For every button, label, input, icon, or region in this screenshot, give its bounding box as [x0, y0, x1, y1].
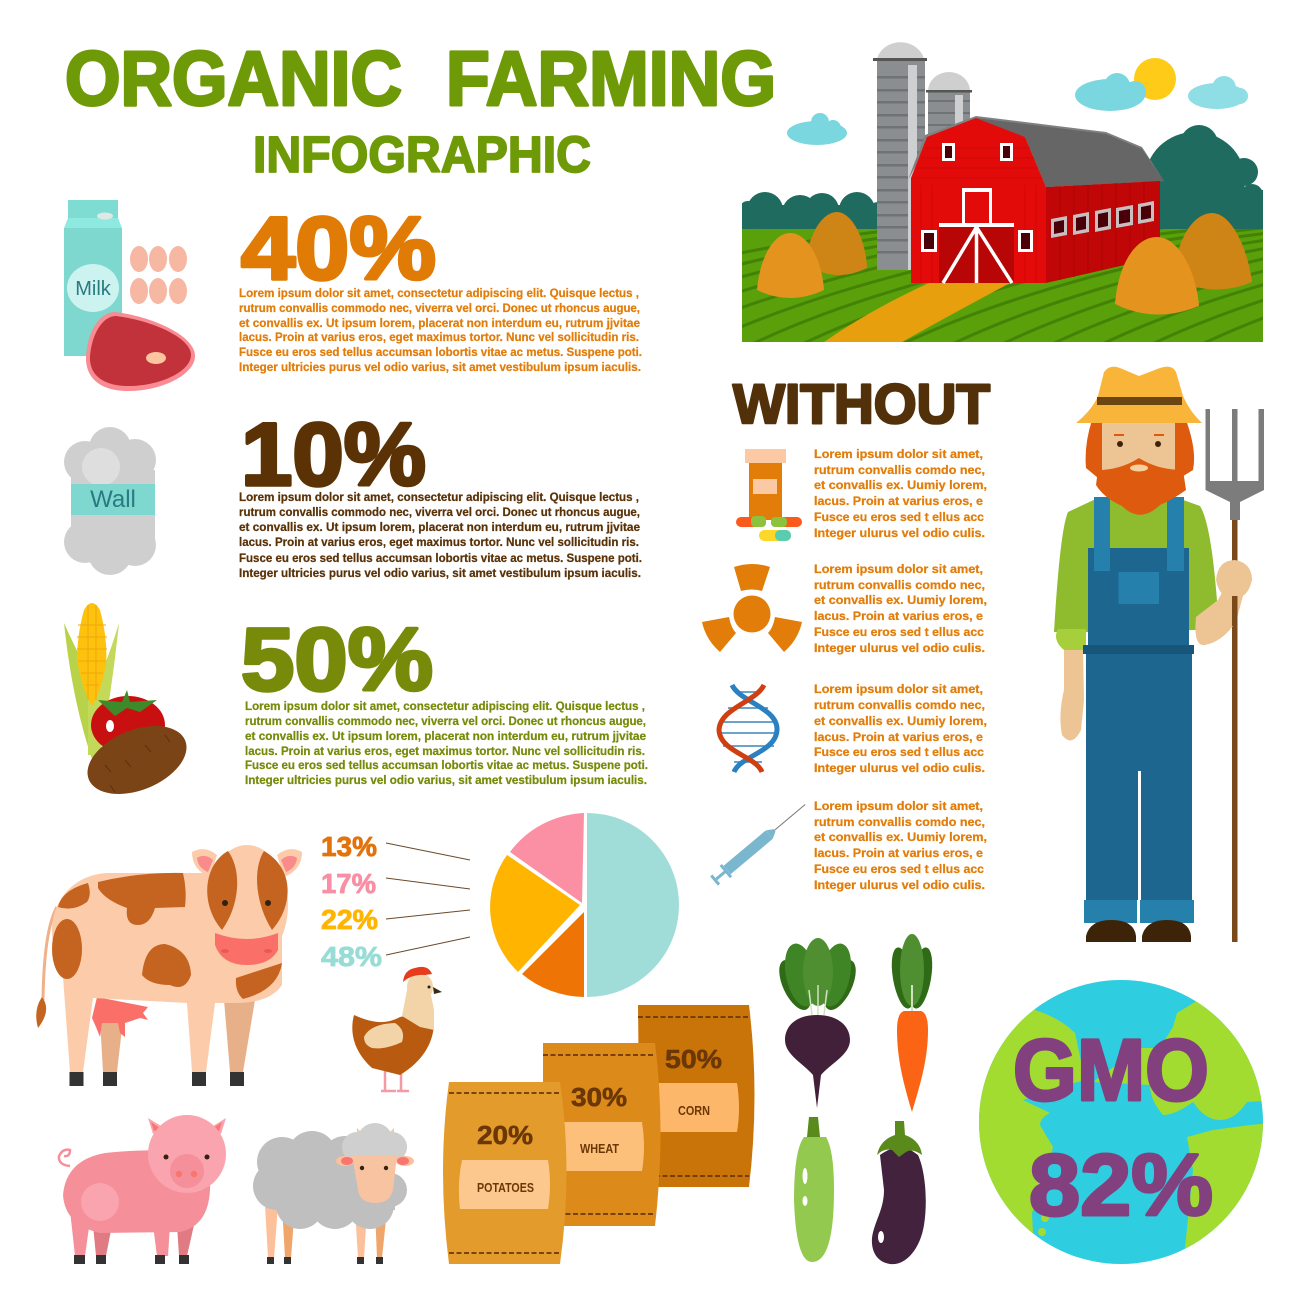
text block: pills: Lorem ipsum dolor sit amet,	[814, 447, 983, 461]
beet	[773, 938, 862, 1108]
haystacks	[757, 212, 1252, 315]
text block: dna: lacus. Proin at varius eros, e	[814, 730, 983, 744]
pitchfork	[1206, 409, 1264, 942]
field	[742, 229, 1263, 342]
text block: 10%	[239, 490, 642, 580]
pie labels: 13%	[321, 831, 377, 862]
path	[824, 283, 1010, 342]
text block: 50%	[245, 699, 648, 787]
wool body	[253, 1131, 407, 1229]
text block: 50%: et convallis ex. Ut ipsum lorem, placerat non interdum eu, rutrum jjvitae	[245, 729, 646, 743]
icon: syringe	[709, 798, 810, 887]
horns	[357, 1128, 394, 1136]
globe	[979, 980, 1263, 1264]
sack: wheat: WHEAT	[580, 1141, 619, 1156]
pie labels: 48%	[321, 941, 382, 972]
text block: pills	[814, 447, 987, 540]
legs	[1086, 654, 1192, 900]
sack: wheat	[543, 1043, 660, 1226]
text block: 50%: Integer ultricies purus vel odio varius, sit amet vestibulum ipsum iaculis.	[245, 773, 647, 787]
pie labels: 22%	[321, 904, 378, 935]
cuffs	[1084, 900, 1194, 923]
continents	[979, 1002, 1263, 1248]
text block: dna: rutrum convallis comdo nec,	[814, 698, 985, 712]
text block: dna: Lorem ipsum dolor sit amet,	[814, 682, 983, 696]
pie leader lines	[386, 843, 470, 955]
text block: syringe: rutrum convallis comdo nec,	[814, 815, 985, 829]
text block: 40%: rutrum convallis commodo nec, viverra vel orci. Donec ut rhoncus augue,	[239, 301, 640, 315]
barn door	[939, 188, 1014, 283]
legs	[265, 1205, 278, 1258]
text block: syringe: lacus. Proin at varius eros, e	[814, 846, 983, 860]
farmer	[1054, 367, 1264, 942]
legs	[93, 1225, 112, 1256]
shoes	[1086, 920, 1191, 942]
ears	[192, 849, 302, 877]
cow	[36, 845, 302, 1086]
text block: 10%: Fusce eu eros sed tellus accumsan lobortis vitae ac metus. Suspene poti.	[239, 551, 642, 565]
sack: corn: CORN	[678, 1103, 710, 1118]
stat: 10%: 10%	[241, 404, 426, 504]
text block: syringe: Lorem ipsum dolor sit amet,	[814, 799, 983, 813]
icon: pill bottle	[736, 449, 802, 541]
face	[352, 1155, 397, 1203]
text block: syringe: Integer ulurus vel odio culis.	[814, 878, 985, 892]
hand	[1216, 560, 1252, 598]
icon: cloud left	[787, 113, 847, 145]
silo back	[926, 72, 972, 152]
right arm	[1195, 585, 1244, 645]
text block: 10%: rutrum convallis commodo nec, viverra vel orci. Donec ut rhoncus augue,	[239, 505, 640, 519]
text block: pills: et convallis ex. Uumiy lorem,	[814, 478, 987, 492]
hooves	[267, 1257, 383, 1264]
pig	[59, 1115, 226, 1264]
text block: syringe: et convallis ex. Uumiy lorem,	[814, 830, 987, 844]
hooves	[70, 1072, 244, 1086]
text block: radiation: lacus. Proin at varius eros, e	[814, 609, 983, 623]
left arm	[1060, 650, 1084, 740]
udder	[92, 997, 148, 1037]
trees	[739, 125, 1263, 235]
text block: 40%	[239, 286, 642, 374]
belt	[1083, 645, 1194, 654]
icon: cloud large	[1075, 73, 1146, 111]
icon: cloud right	[1188, 76, 1248, 109]
stat: 40%: 40%	[241, 198, 436, 298]
icon: milk, eggs and meat: Milk	[75, 278, 112, 300]
sheep	[253, 1123, 414, 1264]
pocket	[1118, 572, 1159, 604]
body	[52, 873, 282, 1072]
body	[63, 1150, 210, 1233]
text block: dna	[814, 682, 987, 775]
icon: sun	[1134, 58, 1176, 100]
head	[148, 1115, 226, 1193]
text block: 40%: Integer ultricies purus vel odio varius, sit amet vestibulum ipsum iaculis.	[239, 360, 641, 374]
barn windows	[921, 143, 1154, 252]
subtitle: INFOGRAPHIC	[253, 126, 591, 183]
text block: radiation: Fusce eu eros sed t ellus acc	[814, 625, 984, 639]
text block: 50%: lacus. Proin at varius eros, eget maximus tortor. Nunc vel sollicitudin ris.	[245, 744, 645, 758]
icon: corn, tomato and potato	[64, 603, 196, 807]
silo front	[873, 42, 927, 270]
sack: potatoes	[443, 1082, 566, 1264]
tail	[43, 907, 57, 1000]
title: FARMING	[446, 36, 776, 122]
text block: 10%: Lorem ipsum dolor sit amet, consectetur adipiscing elit. Quisque lectus ,	[239, 490, 639, 504]
title	[65, 36, 776, 122]
icon: wool: Wall	[90, 486, 136, 513]
text block: 50%: Fusce eu eros sed tellus accumsan lobortis vitae ac metus. Suspene poti.	[245, 758, 648, 772]
text block: pills: lacus. Proin at varius eros, e	[814, 494, 983, 508]
stat: 50%: 50%	[241, 609, 433, 709]
text block: dna: et convallis ex. Uumiy lorem,	[814, 714, 987, 728]
icon: radiation	[702, 564, 802, 652]
rear legs	[100, 1000, 255, 1072]
pie labels: 17%	[321, 868, 376, 899]
title: ORGANIC	[65, 36, 402, 122]
tail	[59, 1150, 70, 1166]
straps	[1094, 497, 1184, 571]
text block: 50%: Lorem ipsum dolor sit amet, consectetur adipiscing elit. Quisque lectus ,	[245, 699, 645, 713]
heading: without: WITHOUT	[733, 372, 990, 435]
text block: 10%: lacus. Proin at varius eros, eget maximus tortor. Nunc vel sollicitudin ris.	[239, 535, 639, 549]
wool head	[342, 1123, 407, 1162]
text block: pills: rutrum convallis comdo nec,	[814, 463, 985, 477]
text block: radiation: rutrum convallis comdo nec,	[814, 578, 985, 592]
text block: syringe	[814, 799, 987, 892]
text block: 40%: Lorem ipsum dolor sit amet, consectetur adipiscing elit. Quisque lectus ,	[239, 286, 639, 300]
text block: radiation	[814, 562, 987, 655]
text block: dna: Integer ulurus vel odio culis.	[814, 761, 985, 775]
text block: dna: Fusce eu eros sed t ellus acc	[814, 745, 984, 759]
bib	[1088, 548, 1189, 646]
text block: 40%: Fusce eu eros sed tellus accumsan lobortis vitae ac metus. Suspene poti.	[239, 345, 642, 359]
ears	[148, 1118, 164, 1134]
text block: radiation: Integer ulurus vel odio culis.	[814, 641, 985, 655]
sack: corn	[638, 1005, 754, 1187]
icon: milk, eggs and meat	[64, 200, 195, 391]
hat	[1076, 367, 1202, 423]
chicken	[352, 967, 442, 1091]
carrot	[888, 934, 936, 1112]
82% text: 82%	[1029, 1137, 1213, 1234]
text block: 50%: rutrum convallis commodo nec, viverra vel orci. Donec ut rhoncus augue,	[245, 714, 646, 728]
text block: 10%: Integer ultricies purus vel odio varius, sit amet vestibulum ipsum iaculis.	[239, 566, 641, 580]
shirt	[1054, 497, 1218, 632]
text block: pills: Fusce eu eros sed t ellus acc	[814, 510, 984, 524]
snout	[215, 933, 278, 965]
sack: potatoes: POTATOES	[477, 1180, 534, 1195]
text block: radiation: et convallis ex. Uumiy lorem,	[814, 593, 987, 607]
icon: dna	[719, 685, 777, 772]
sack: wheat: 30%	[571, 1082, 627, 1112]
pie chart	[490, 813, 679, 997]
text block: syringe: Fusce eu eros sed t ellus acc	[814, 862, 984, 876]
text block: pills: Integer ulurus vel odio culis.	[814, 526, 985, 540]
barn	[908, 116, 1164, 283]
text block: 40%: lacus. Proin at varius eros, eget maximus tortor. Nunc vel sollicitudin ris.	[239, 330, 639, 344]
GMO text: GMO	[1013, 1022, 1209, 1119]
zucchini	[794, 1117, 834, 1262]
sack: corn: 50%	[665, 1044, 722, 1074]
pie labels	[321, 831, 382, 972]
eggplant	[872, 1121, 926, 1264]
patches	[52, 873, 282, 999]
icon: wool	[64, 427, 156, 575]
text block: 10%: et convallis ex. Ut ipsum lorem, placerat non interdum eu, rutrum jjvitae	[239, 520, 640, 534]
text block: radiation: Lorem ipsum dolor sit amet,	[814, 562, 983, 576]
hooves	[74, 1255, 189, 1264]
head	[1086, 420, 1194, 515]
ears	[336, 1156, 354, 1166]
text block: 40%: et convallis ex. Ut ipsum lorem, placerat non interdum eu, rutrum jjvitae	[239, 316, 640, 330]
sack: potatoes: 20%	[477, 1120, 533, 1150]
head	[206, 845, 288, 965]
